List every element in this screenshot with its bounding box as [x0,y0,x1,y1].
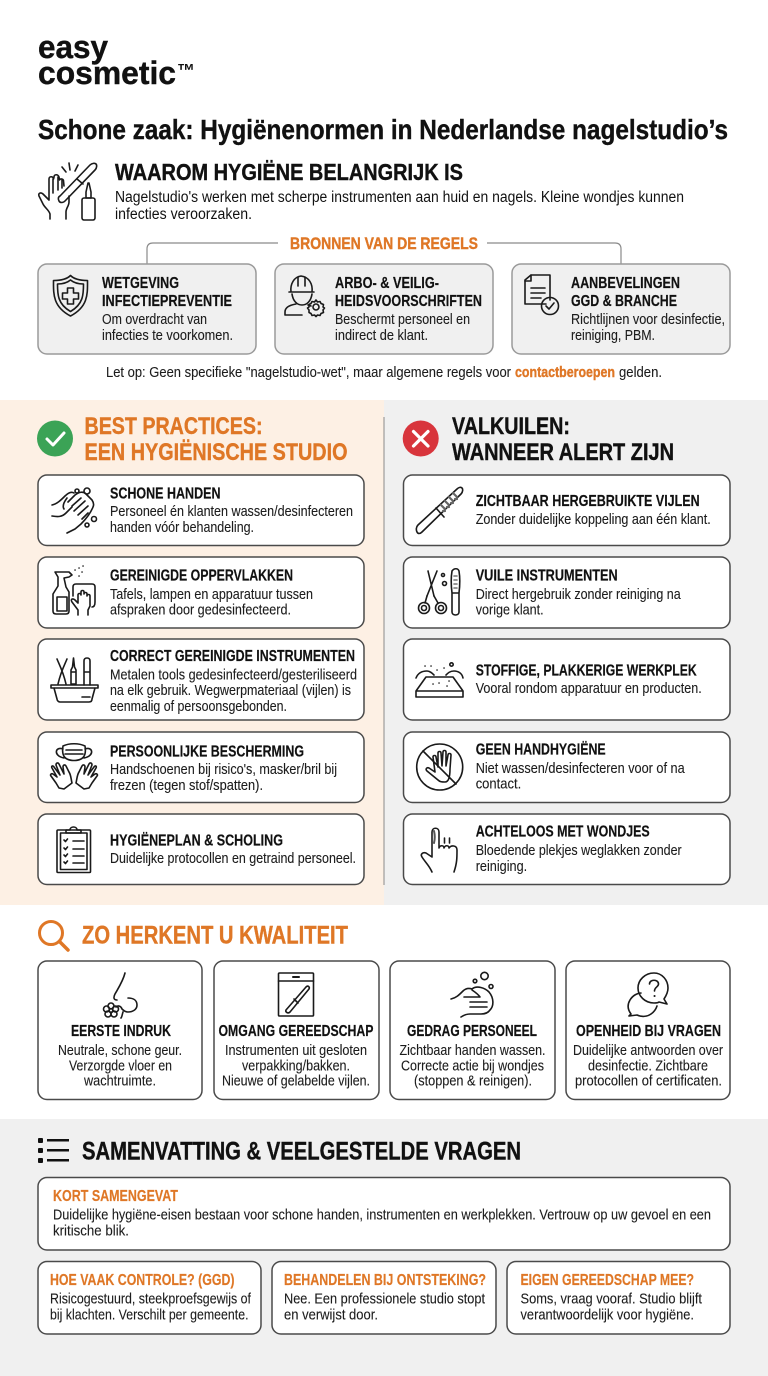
text: ARBO- & VEILIG- [335,275,439,292]
card: werkplek [404,639,730,720]
logo [38,29,195,91]
card: werkplek: Vooral rondom apparatuur en producten. [476,681,702,697]
icon: nail file [416,487,463,534]
logo: easy [38,29,108,65]
card: instrumenten [38,639,364,720]
heading: WAAROM HYGIËNE BELANGRIJK IS [115,159,463,185]
icon: washing hands [52,488,96,533]
section heading: kwaliteit [40,922,348,950]
panel: wetgeving: INFECTIEPREVENTIE [102,293,232,310]
card: openheid: Duidelijke antwoorden over [573,1043,723,1059]
text: OMGANG GEREEDSCHAP [218,1023,374,1040]
icon: magnifier [40,922,68,950]
heading [452,413,674,466]
card: behandelen bij ontsteking: Nee. Een professionele studio stopt [284,1292,485,1308]
card: bescherming [38,732,364,802]
logo: cosmetic [38,55,176,91]
card: instrumenten: eenmalig of persoonsgebonden. [110,699,287,715]
text: EERSTE INDRUK [71,1023,171,1040]
panel: wetgeving: Om overdracht van [102,312,207,328]
panel: aanbevelingen [512,264,730,354]
card: gedrag personeel: Zichtbaar handen wassen. [400,1043,546,1059]
card: hoe vaak controle: bij klachten. Verschilt per gemeente. [50,1308,248,1324]
note: gelden. [619,364,662,381]
card: schone handen [38,475,364,546]
card: eerste indruk [38,961,202,1100]
text: OPENHEID BIJ VRAGEN [576,1023,721,1040]
card: gereinigde oppervlakken [38,557,364,628]
icon: list [38,1138,69,1163]
card: instrumenten: Metalen tools gedesinfecteerd/gesteriliseerd [110,668,357,684]
card: gedrag personeel: Correcte actie bij wondjes [401,1058,544,1074]
card: hygieneplan: Duidelijke protocollen en getraind personeel. [110,851,356,867]
icon: hand with nail file and bottle [39,163,97,220]
card: eerste indruk: Verzorgde vloer en [69,1058,172,1074]
heading: BEST PRACTICES: [84,413,262,440]
card: hoe vaak controle: Risicogestuurd, steekproefsgewijs of [50,1292,252,1308]
panel: arbo: indirect de klant. [335,328,428,344]
text: SCHONE HANDEN [110,486,220,502]
body text: infecties veroorzaken. [115,206,252,223]
panel: arbo [275,264,493,354]
text: GEEN HANDHYGIËNE [476,740,606,758]
heading: EEN HYGIËNISCHE STUDIO [84,439,348,466]
card: eigen gereedschap: Soms, vraag vooraf. Studio blijft [520,1292,702,1308]
body text [115,189,684,223]
icon: spray and cloth [53,566,95,615]
connector lines [147,243,621,264]
heading: VALKUILEN: [452,413,570,440]
text: GEREINIGDE OPPERVLAKKEN [110,568,293,584]
icon: dusty workplace [416,663,463,697]
text: ZICHTBAAR HERGEBRUIKTE VIJLEN [476,493,700,510]
card: omgang gereedschap [214,961,379,1100]
card: openheid: protocollen of certificaten. [575,1074,722,1090]
card: gereinigde oppervlakken: afspraken door gedesinfecteerd. [110,602,291,618]
icon: shield [53,276,88,316]
card: eigen gereedschap: EIGEN GEREEDSCHAP MEE? [520,1272,694,1289]
card: omgang gereedschap: Instrumenten uit gesloten [225,1043,367,1059]
heading [84,413,348,466]
panel: wetgeving: infecties te voorkomen. [102,328,233,344]
card: eigen gereedschap: verantwoordelijk voor hygiëne. [520,1308,694,1324]
body text: Nagelstudio's werken met scherpe instrumenten aan huid en nagels. Kleine wondjes kunnen [115,189,684,206]
card: kort samengevat: kritische blik. [53,1224,129,1240]
intro block [39,159,684,223]
card: behandelen bij ontsteking [272,1262,496,1334]
text: PERSOONLIJKE BESCHERMING [110,744,304,760]
card: instrumenten: na elk gebruik. Wegwerpmateriaal (vijlen) is [110,683,351,699]
note: contactberoepen [515,364,615,381]
card: wondjes: reiniging. [476,859,527,875]
card: eigen gereedschap [507,1262,730,1334]
text: STOFFIGE, PLAKKERIGE WERKPLEK [476,662,697,680]
card: gereinigde oppervlakken: Tafels, lampen en apparatuur tussen [110,587,313,603]
card: behandelen bij ontsteking: BEHANDELEN BIJ ONTSTEKING? [284,1272,486,1289]
icon: green check [37,420,73,456]
card: kort samengevat [38,1178,730,1250]
icon: soapy hand [451,972,493,1017]
card: vuile instrumenten [404,557,730,628]
card: vuile instrumenten: vorige klant. [476,602,544,618]
card: openheid [566,961,730,1100]
panel: valkuilen [384,400,768,905]
card: bescherming: Handschoenen bij risico's, masker/bril bij [110,762,337,778]
heading: WANNEER ALERT ZIJN [452,439,674,466]
card: schone handen: Personeel én klanten wassen/desinfecteren [110,504,353,520]
panel: wetgeving [38,264,256,354]
text: GEDRAG PERSONEEL [407,1023,537,1040]
card: hoe vaak controle: HOE VAAK CONTROLE? (GGD) [50,1272,234,1289]
icon: sealed package with file [278,973,314,1016]
text: VUILE INSTRUMENTEN [476,568,618,584]
panel: aanbevelingen: GGD & BRANCHE [571,293,677,310]
icon: speech bubbles with question [628,973,668,1016]
card: omgang gereedschap: Nieuwe of gelabelde vijlen. [222,1074,370,1090]
card: kort samengevat: KORT SAMENGEVAT [53,1188,178,1205]
text: ACHTELOOS MET WONDJES [476,824,650,840]
icon: forbidden hand [417,744,463,790]
card: gedrag personeel: (stoppen & reinigen). [414,1074,532,1090]
card: behandelen bij ontsteking: en verwijst door. [284,1308,378,1324]
card: openheid: desinfectie. Zichtbare [588,1058,708,1074]
text: HYGIËNEPLAN & SCHOLING [110,832,283,850]
icon: scissors and file [418,569,460,615]
panel: arbo: Beschermt personeel en [335,312,470,328]
card: hoe vaak controle [38,1262,261,1334]
card: geen handhygiene [404,732,730,802]
panel: aanbevelingen: Richtlijnen voor desinfectie, [571,312,725,328]
text: CORRECT GEREINIGDE INSTRUMENTEN [110,648,355,665]
icon: clipboard [57,827,90,872]
icon: mask and gloves [51,744,97,789]
card: vijlen: Zonder duidelijke koppeling aan één klant. [476,512,711,528]
icon: worker with gear [285,276,324,316]
icon: document with check [525,275,558,314]
card: eerste indruk: wachtruimte. [83,1074,156,1090]
heading: bronnen: BRONNEN VAN DE REGELS [290,235,478,253]
card: omgang gereedschap: verpakking/bakken. [242,1058,350,1074]
icon: pointing hand [421,828,457,872]
card: eerste indruk: Neutrale, schone geur. [58,1043,182,1059]
card: vuile instrumenten: Direct hergebruik zonder reiniging na [476,587,681,603]
card: schone handen: handen vóór behandeling. [110,520,254,536]
icon: instruments in tray [51,658,98,702]
card: geen handhygiene: Niet wassen/desinfecteren voor of na [476,761,686,777]
text: WETGEVING [102,275,179,292]
panel: samenvatting [0,1119,768,1376]
note: Let op: Geen specifieke "nagelstudio-wet", maar algemene regels voor [106,364,511,381]
panel: best practices [0,400,384,905]
card: geen handhygiene: contact. [476,776,521,792]
heading: SAMENVATTING & VEELGESTELDE VRAGEN [82,1138,521,1166]
card: gedrag personeel [390,961,555,1100]
panel: arbo: HEIDSVOORSCHRIFTEN [335,293,482,310]
logo: ™ [177,61,195,82]
card: wondjes [404,814,730,884]
card: hygieneplan [38,814,364,884]
heading: ZO HERKENT U KWALITEIT [82,922,348,950]
card: wondjes: Bloedende plekjes weglakken zonder [476,843,682,859]
icon: red cross [403,420,439,456]
text: AANBEVELINGEN [571,275,680,292]
panel: aanbevelingen: reiniging, PBM. [571,328,655,344]
card: bescherming: frezen (tegen stof/spatten). [110,778,263,794]
icon: nose and flower [104,973,137,1018]
card: vijlen [404,475,730,546]
